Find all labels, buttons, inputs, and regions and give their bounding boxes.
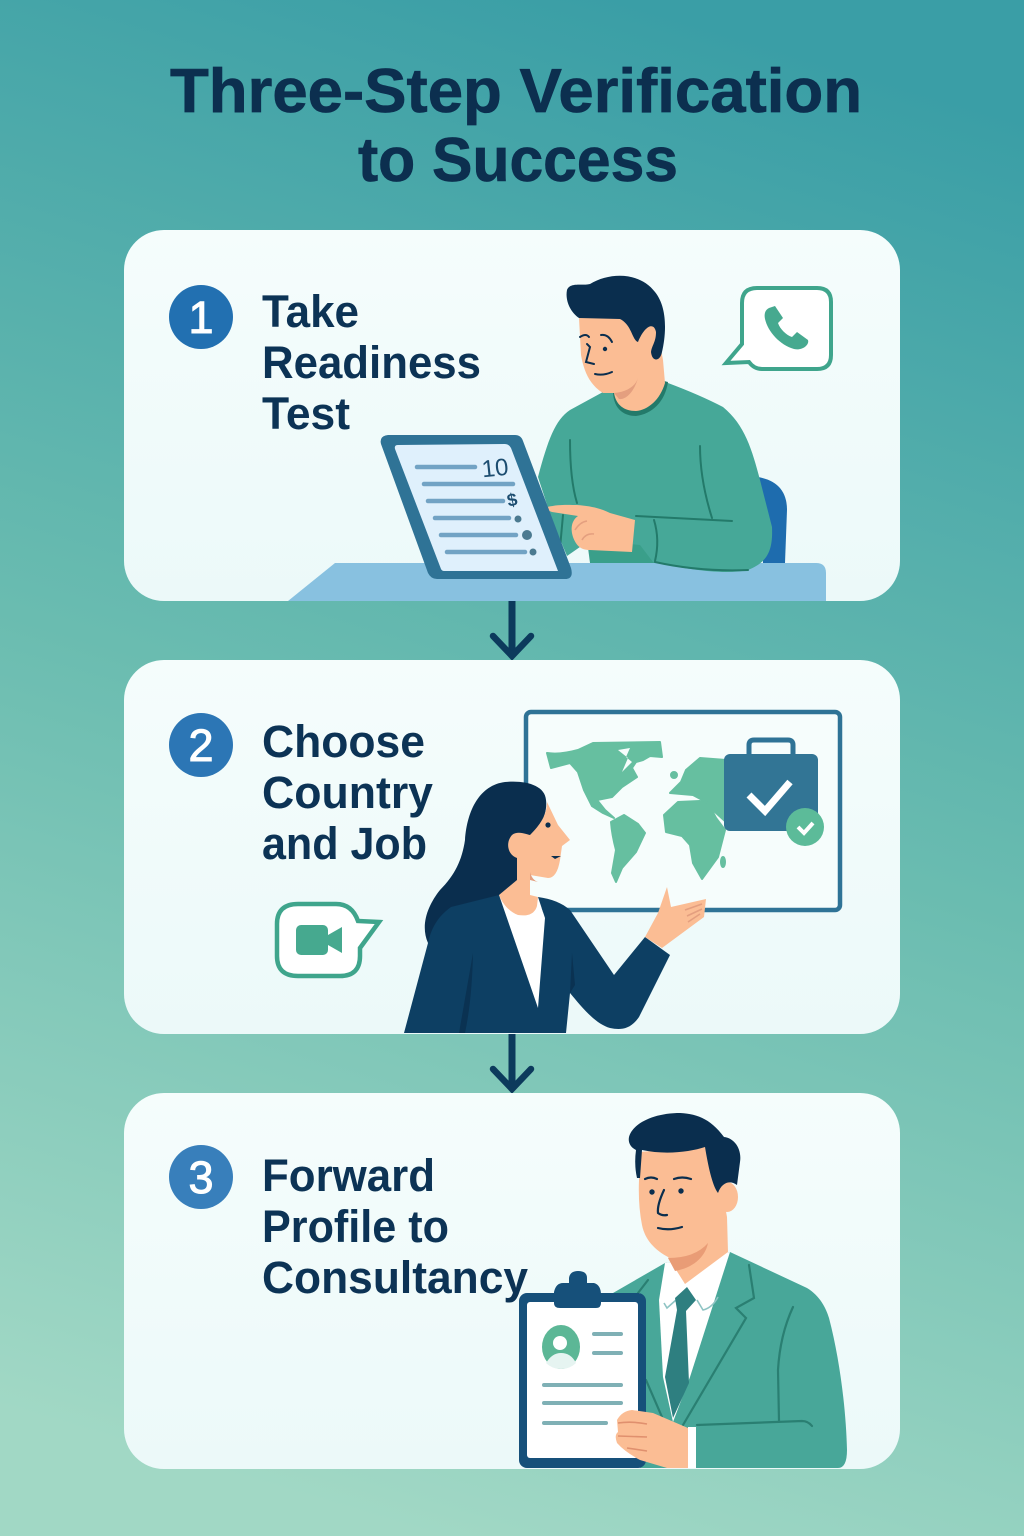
title: Three-Step Verification <box>170 57 862 126</box>
icon: phone speech bubble <box>726 288 831 369</box>
heading: Take Readiness Test: Take <box>262 286 359 337</box>
title <box>170 57 862 195</box>
heading: Choose Country and Job: and Job <box>262 818 427 869</box>
step number 1: 1 <box>188 292 214 343</box>
panel: step 2 <box>124 660 900 1034</box>
panel: step 1 <box>124 230 900 601</box>
illustration: tablet with test: 10 <box>480 454 510 483</box>
icon: video speech bubble <box>277 904 379 976</box>
illustration: desk <box>288 563 826 601</box>
heading: Forward Profile to Consultancy: Consultancy <box>262 1252 528 1303</box>
profile avatar <box>542 1325 580 1369</box>
step number 3: 3 <box>188 1152 214 1203</box>
hand <box>547 505 635 552</box>
heading: Forward Profile to Consultancy: Forward <box>262 1150 435 1201</box>
heading: Forward Profile to Consultancy: Profile to <box>262 1201 449 1252</box>
map inner gaps <box>618 748 632 772</box>
world map <box>547 742 726 882</box>
illustration: tablet with test: $ <box>505 489 519 511</box>
arrow: step 1 to step 2 <box>493 601 531 656</box>
illustration: world map board <box>526 712 840 910</box>
illustration: man with laptop <box>538 276 772 572</box>
panel: step 3 <box>124 1093 900 1469</box>
step number 3 <box>169 1145 233 1209</box>
heading: Take Readiness Test <box>262 286 481 439</box>
illustration: chair <box>758 477 787 563</box>
icon: briefcase with check <box>724 740 824 846</box>
illustration: clipboard with profile <box>519 1271 646 1468</box>
title: to Success <box>358 126 678 195</box>
illustration: hand holding clipboard <box>616 1410 696 1468</box>
collar shadow <box>664 1297 718 1310</box>
heading: Choose Country and Job: Choose <box>262 716 425 767</box>
illustration: consultant in green suit <box>613 1113 847 1468</box>
heading: Forward Profile to Consultancy <box>262 1150 528 1303</box>
heading: Choose Country and Job: Country <box>262 767 433 818</box>
step number 1 <box>169 285 233 349</box>
step number 2 <box>169 713 233 777</box>
arrow: step 2 to step 3 <box>493 1034 531 1089</box>
illustration: woman presenting <box>404 782 706 1033</box>
illustration: tablet with test <box>381 435 572 579</box>
heading: Choose Country and Job <box>262 716 433 869</box>
step number 2: 2 <box>188 720 214 771</box>
tie <box>665 1287 696 1418</box>
heading: Take Readiness Test: Readiness <box>262 337 481 388</box>
heading: Take Readiness Test: Test <box>262 388 350 439</box>
